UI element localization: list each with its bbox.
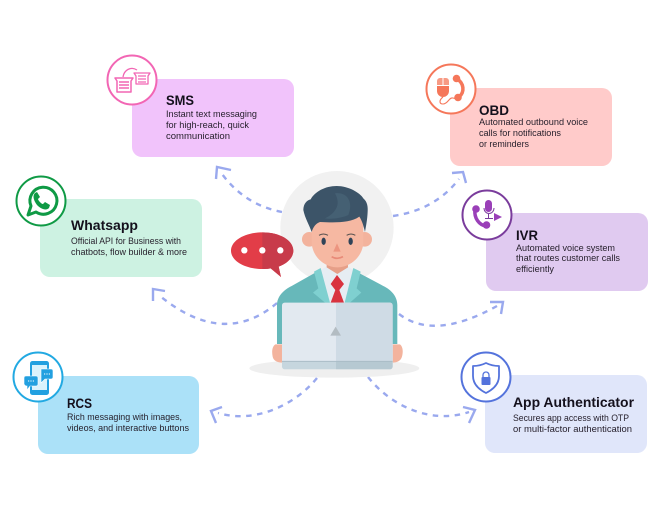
IVR heading: IVR [516, 228, 538, 243]
Whatsapp heading: Whatsapp [71, 218, 138, 233]
SMS description: for high-reach, quick [166, 120, 249, 130]
panel: OBD [426, 64, 612, 166]
icon: SMS messages [108, 56, 156, 104]
SMS description: Instant text messaging [166, 109, 257, 119]
Whatsapp description: chatbots, flow builder & more [71, 247, 187, 257]
jacket [277, 270, 397, 344]
Whatsapp description: Official API for Business with [71, 236, 181, 246]
ground shadow [249, 359, 419, 378]
RCS description: videos, and interactive buttons [67, 423, 189, 433]
App Authenticator description: or multi-factor authentication [513, 424, 632, 434]
RCS heading: RCS [67, 396, 92, 411]
hands [272, 344, 403, 363]
illustration: person with laptop [249, 171, 419, 378]
icon: OBD phone and mouse [426, 64, 476, 114]
arrow: to App Authenticator [368, 377, 475, 423]
OBD description [479, 117, 588, 149]
icon: shield lock [462, 352, 510, 402]
SMS description: communication [166, 131, 230, 141]
icon: RCS phone and chats [14, 352, 62, 402]
laptop [282, 303, 393, 369]
SMS heading: SMS [166, 93, 194, 108]
arrow: to IVR [399, 302, 503, 326]
IVR description: efficiently [516, 264, 554, 274]
icon: IVR phone and mic [462, 190, 512, 240]
OBD description: or reminders [479, 139, 529, 149]
RCS description [67, 412, 189, 433]
arrow: to SMS [216, 167, 282, 212]
Whatsapp description [71, 236, 187, 257]
speech bubble [231, 232, 293, 277]
icon: Whatsapp [16, 176, 66, 226]
SMS description [166, 109, 257, 141]
IVR description: that routes customer calls [516, 253, 620, 263]
arrow: to Whatsapp [153, 289, 277, 324]
IVR description [516, 243, 620, 274]
App Authenticator heading: App Authenticator [513, 395, 635, 410]
OBD description: calls for notifications [479, 128, 561, 138]
hair [303, 186, 368, 232]
IVR description: Automated voice system [516, 243, 615, 253]
OBD description: Automated outbound voice [479, 117, 588, 127]
App Authenticator description: Secures app access with OTP [513, 413, 629, 423]
panel: RCS [14, 352, 199, 454]
arrow: to RCS [211, 378, 317, 423]
RCS description: Rich messaging with images, [67, 412, 182, 422]
shirt and tie [320, 266, 355, 303]
panel: IVR [462, 190, 648, 291]
panel: SMS [108, 56, 294, 157]
panel: Whatsapp [16, 176, 202, 277]
neck and head [302, 217, 372, 274]
panel: App Authenticator [462, 352, 647, 453]
lapels [313, 268, 361, 303]
App Authenticator description [513, 413, 632, 434]
OBD heading: OBD [479, 103, 509, 118]
backdrop circle [280, 171, 394, 284]
arrow: to OBD [393, 172, 466, 216]
